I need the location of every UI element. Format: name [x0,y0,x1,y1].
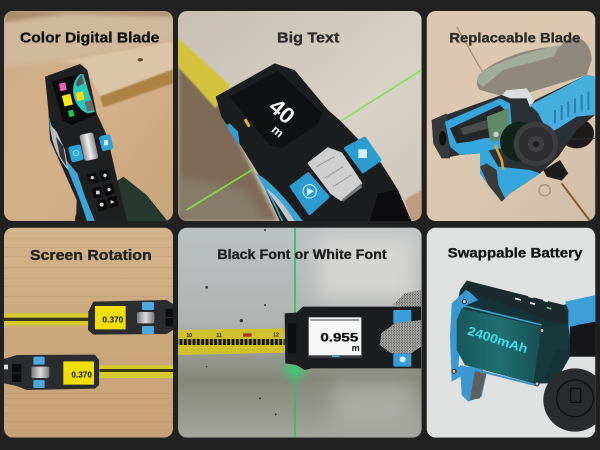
icon: gloved hand [75,177,167,223]
green laser lines [186,168,255,210]
blue shell [445,98,513,155]
heading: Swappable Battery: Swappable Battery [448,244,583,260]
panel: Screen Rotation [4,228,173,438]
lower device [4,355,99,390]
spool wheel [543,368,600,432]
icon: laser button [346,138,380,172]
heading: Color Digital Blade: Color Digital Blade [20,30,159,47]
heading: Big Text: Big Text [277,30,339,47]
top button bar [467,281,568,323]
device: tape measure upright [45,64,128,223]
lower blue chassis [480,150,540,202]
keypad [87,169,119,212]
device: tape measure close up [216,63,411,221]
yellow tape: 10 [186,333,192,339]
panel: Color Digital Blade [4,11,173,223]
heading: Replaceable Blade: Replaceable Blade [449,30,581,46]
screen [230,71,322,148]
icon: blue button right [99,134,114,151]
battery pack [457,305,542,385]
yellow tape [178,38,230,108]
green laser vertical line [292,228,298,438]
white bracket [502,88,535,107]
left housing [432,113,450,158]
blue button bottom [142,326,154,334]
icon: blue button bottom [393,353,411,367]
icon: blue button left [68,144,84,163]
right dark body [533,325,570,383]
blue rear housing [565,295,596,350]
icon: play button [291,174,328,213]
gloved hand [477,38,592,98]
upper device [88,300,173,335]
heading: Screen Rotation: Screen Rotation [30,247,152,264]
spool wheel [514,122,558,166]
gloved thumb [380,320,421,353]
icon: embossed ring [539,185,550,196]
reading: 40 [264,93,300,129]
yellow tape [178,328,285,355]
lower tape blade [99,365,173,378]
rear blue ribs [530,75,595,133]
screen: m [269,123,286,141]
blue button bottom [33,380,45,388]
upper tape blade [4,313,89,325]
yellow screen: 0.370 [102,314,124,324]
yellow tape: 12 [273,333,279,339]
panel: Big Text [178,11,422,221]
scroll wheel [309,148,362,202]
white screen: m [352,343,360,353]
device silhouette [432,75,595,202]
white screen [309,317,361,357]
panel: Swappable Battery [427,228,600,438]
black spool behind [566,122,594,148]
panel: Black Font or White Font [178,228,422,438]
scroll wheel [79,132,99,161]
finger [405,190,422,221]
screws [452,300,544,386]
device: opened tape measure [432,75,595,202]
device: tape measure with white screen [285,307,421,370]
glove above [393,290,421,310]
yellow screen: 0.370 [71,369,92,379]
battery capacity label: 2400mAh [466,324,529,356]
gold ribbon [495,145,503,170]
panel: Replaceable Blade [427,11,595,221]
device silhouette [457,281,596,383]
icon: blue button top [393,310,411,323]
blue button top [33,357,45,365]
heading: Black Font or White Font: Black Font or White Font [217,246,387,262]
blue button top [142,302,154,310]
color screen [52,73,95,125]
device: battery compartment [450,281,600,432]
yellow tape: 11 [216,333,222,339]
blue frame and trigger [450,289,487,402]
white screen: 0.955 [320,331,358,345]
